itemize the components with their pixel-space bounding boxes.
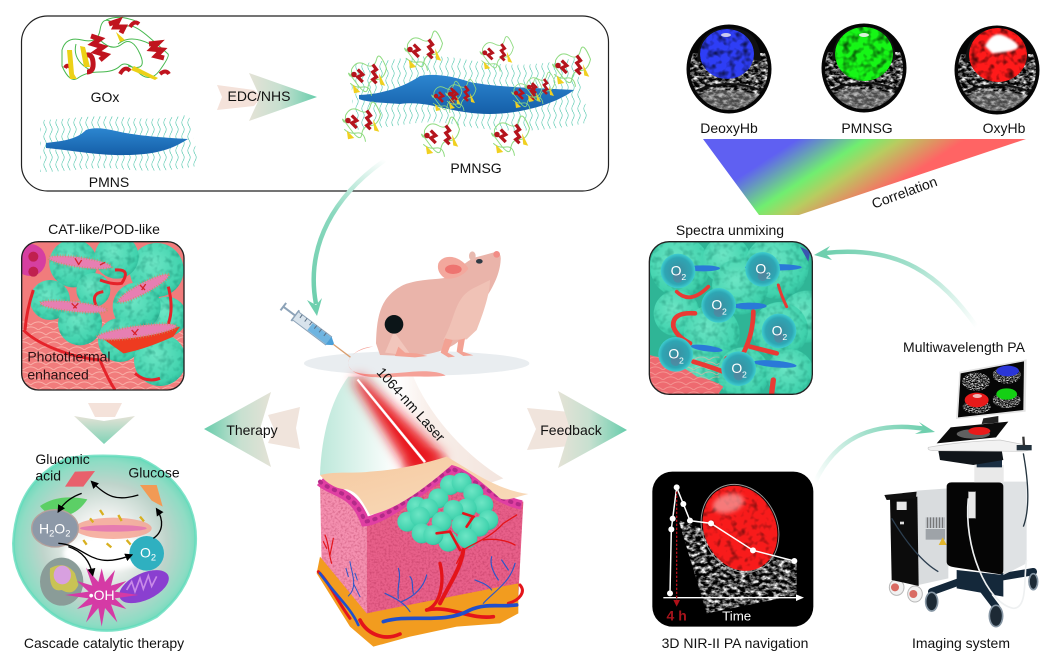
base and casters [932, 572, 1033, 607]
chart: time curve [663, 484, 804, 624]
labels: O2: O [755, 261, 766, 277]
labels: O2: 2 [766, 270, 771, 280]
labels: O2: 2 [679, 355, 684, 365]
icon: syringe [279, 301, 354, 363]
icon: PMNSG nanosheet with enzymes [342, 31, 590, 157]
tumour signal [702, 485, 778, 572]
label: Spectra unmixing: Spectra unmixing [676, 222, 784, 238]
icon: H2O2 [32, 510, 78, 547]
label: Photothermal enhanced: enhanced [27, 366, 89, 382]
right column illustration group [649, 235, 1038, 627]
labels: O2: O [731, 360, 742, 376]
labels: O2: 2 [782, 332, 787, 342]
icon: hydroxyl radical [65, 568, 138, 627]
label: 3D NIR-II PA navigation: 3D NIR-II PA navigation [662, 635, 808, 651]
icon: O2: 2 [151, 553, 156, 563]
tumour spheres [397, 473, 498, 552]
panel: CAT-like tumour close-up [14, 235, 187, 390]
icon: tumour on mouse [385, 315, 403, 334]
panel: PMNSG image [822, 24, 906, 112]
main body [1002, 482, 1027, 575]
icon: laser beam [353, 377, 453, 483]
arrow: injection [307, 160, 385, 316]
icon: organelle [40, 558, 83, 606]
icon: GOx protein [62, 17, 169, 80]
monitor [956, 359, 1027, 419]
oxygen bubbles [658, 252, 796, 386]
label: OxyHb: OxyHb [983, 120, 1026, 136]
label: Correlation: Correlation [869, 173, 939, 212]
ground ellipse [304, 351, 529, 376]
label: Imaging system: Imaging system [912, 635, 1010, 651]
icon: H2O2: H [39, 520, 49, 536]
panel: OxyHb image [954, 26, 1040, 114]
illustration: skin block [317, 457, 528, 647]
label: EDC/NHS: EDC/NHS [227, 88, 291, 104]
icon: hydroxyl radical: •OH [89, 587, 115, 603]
panel: 3D NIR-II PA navigation [652, 471, 813, 627]
chart: spectra gradient wedge [703, 139, 1026, 215]
label: 1064-nm Laser: 1064-nm Laser [374, 364, 449, 445]
ultrasound slab [678, 520, 797, 613]
label: Photothermal enhanced: Photothermal [27, 349, 111, 365]
label: 4 h: 4 h [667, 608, 687, 624]
panel: cascade catalytic cell [13, 451, 196, 631]
icon: mitochondrion [114, 563, 174, 610]
laser light cone [320, 377, 503, 490]
labels: O2: O [668, 346, 679, 362]
blood vessels [318, 513, 522, 637]
icon: H2O2: 2 [65, 529, 70, 539]
label: PMNS: PMNS [89, 174, 129, 190]
arrow: EDC/NHS [217, 73, 317, 121]
arrow: down chevron [74, 403, 135, 444]
label: GOx: GOx [91, 89, 119, 105]
illustration: mouse and skin model [279, 251, 529, 647]
label: Feedback: Feedback [540, 422, 603, 438]
label: PMNSG: PMNSG [450, 160, 502, 176]
icon: enzyme sheet [75, 510, 152, 547]
icon: PMNS nanosheet [40, 128, 194, 155]
arrow: therapy [204, 392, 300, 467]
icon: O2: O [140, 544, 151, 560]
label: Cascade catalytic therapy: Cascade catalytic therapy [24, 635, 184, 651]
label: Multiwavelength PA: Multiwavelength PA [903, 339, 1026, 355]
labels: O2: O [772, 322, 783, 338]
icon: H2O2: 2 [49, 529, 54, 539]
arrows: catalytic cycle [58, 482, 162, 575]
laser unit [917, 488, 948, 585]
icon: imaging system cart [884, 359, 1038, 627]
label: Glucose: Glucose [128, 464, 180, 480]
stand [982, 416, 998, 424]
console tray [938, 450, 1003, 465]
labels: O2: 2 [722, 306, 727, 316]
icon: leaf [40, 497, 87, 516]
icon: H2O2: O [54, 520, 65, 536]
labels: O2: 2 [742, 370, 747, 380]
label: Time: Time [722, 609, 751, 624]
label: CAT-like/POD-like: CAT-like/POD-like [48, 221, 160, 237]
icon: O2 [129, 536, 164, 571]
panel: PMNSG synthesis [22, 16, 608, 191]
labels: O2: 2 [681, 272, 686, 282]
label: PMNSG: PMNSG [841, 120, 893, 136]
touch screen [937, 422, 1008, 443]
arrow: to imaging system [815, 422, 935, 482]
label: Gluconic acid: Gluconic [35, 451, 90, 467]
panel: spectra unmixing tumour [649, 235, 833, 399]
probe and cable [968, 492, 976, 518]
label: Gluconic acid: acid [35, 468, 61, 484]
label: Therapy: Therapy [226, 422, 278, 438]
icon: gluconic acid [65, 471, 95, 487]
column [974, 465, 1004, 482]
arrow: to spectra unmixing [814, 246, 977, 327]
icon: mouse [348, 251, 501, 377]
arrow: feedback [527, 391, 627, 468]
panel: DeoxyHb image [686, 24, 772, 114]
label: DeoxyHb: DeoxyHb [700, 120, 758, 136]
labels: O2: O [711, 297, 722, 313]
icon: glucose [140, 485, 163, 507]
labels: O2: O [671, 262, 682, 278]
